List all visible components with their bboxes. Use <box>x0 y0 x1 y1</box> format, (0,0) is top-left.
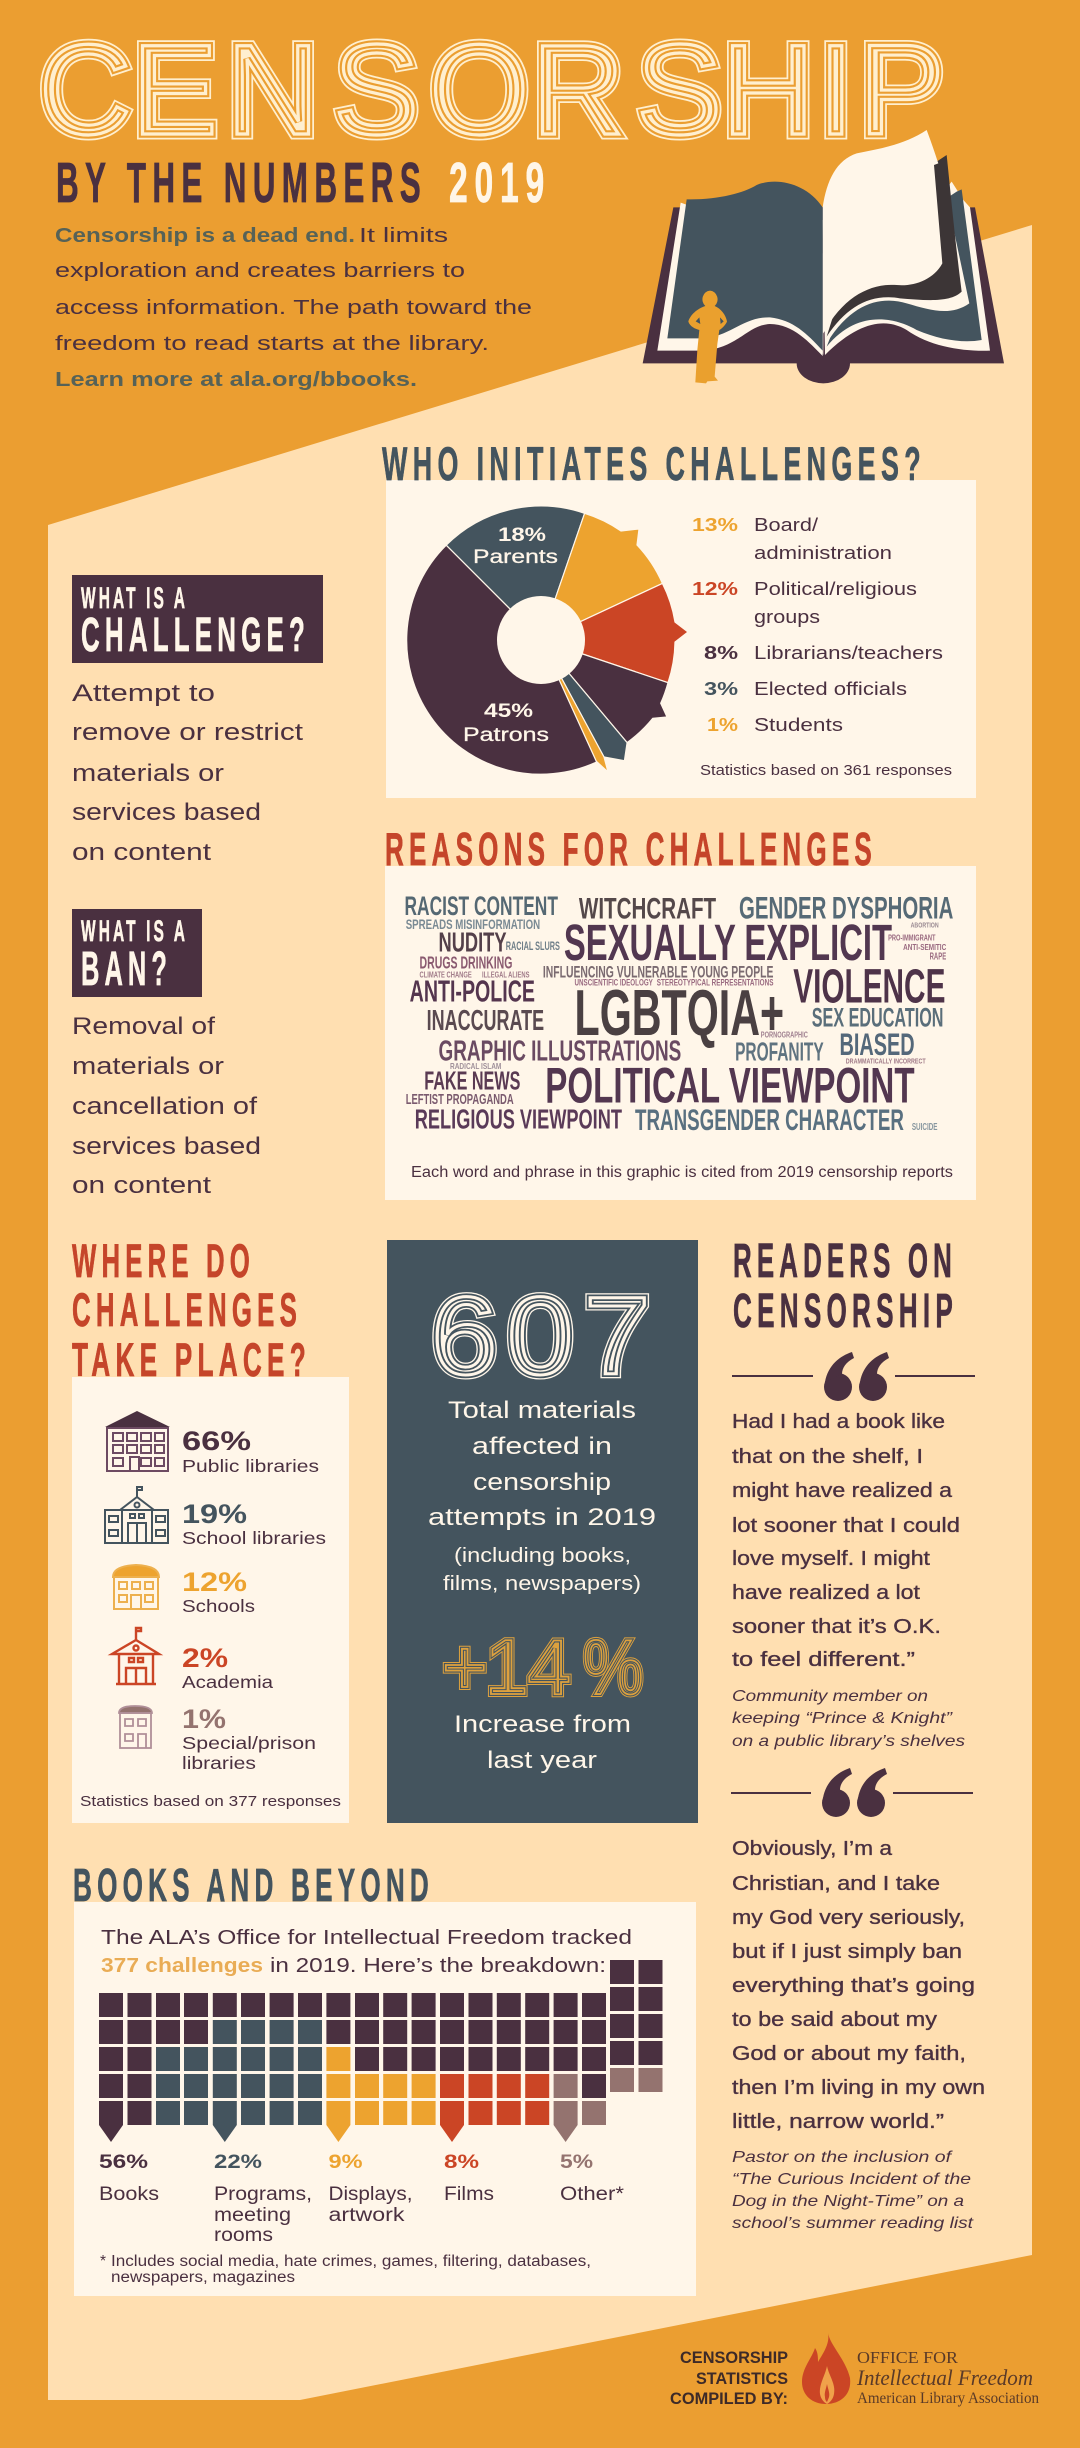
word cloud: INFLUENCING VULNERABLE YOUNG PEOPLE <box>543 962 773 981</box>
stat: school libraries <box>182 1499 326 1548</box>
panel: 607 total materials <box>387 1240 698 1823</box>
attribution one <box>732 1688 965 1750</box>
big number plus 14 percent: % <box>583 1625 643 1711</box>
compiled by text: STATISTICS <box>696 2370 788 2388</box>
stat: academia <box>182 1643 273 1692</box>
attribution two: “The Curious Incident of the <box>732 2171 971 2188</box>
compiled by text: COMPILED BY: <box>670 2390 788 2408</box>
category labels: Other* <box>560 2184 625 2205</box>
pie labels: Patrons <box>463 725 549 746</box>
quote one: that on the shelf, I <box>732 1446 923 1468</box>
category labels: Films <box>444 2184 494 2205</box>
definition: what is a ban: services based <box>72 1133 261 1160</box>
stat: schools: Schools <box>182 1596 255 1616</box>
big number plus 14 percent: +14 <box>442 1623 571 1711</box>
definition: what is a ban: cancellation of <box>72 1093 257 1120</box>
stat: special libraries: Special/prison <box>182 1733 316 1753</box>
title: CENSORSHIP <box>39 19 944 162</box>
logo text: OFFICE FOR <box>857 2348 959 2367</box>
quote two: but if I just simply ban <box>732 1941 962 1963</box>
compiled by text: CENSORSHIP <box>680 2349 788 2367</box>
category labels: 9% <box>328 2152 363 2173</box>
legend: 8% <box>704 643 738 663</box>
description text: attempts in 2019 <box>428 1504 656 1531</box>
legend: 1% <box>707 715 738 735</box>
word cloud: SPREADS MISINFORMATION <box>406 917 540 933</box>
category labels: artwork <box>328 2205 405 2226</box>
quote two: to be said about my <box>732 2009 937 2031</box>
description text: Total materials <box>448 1397 636 1424</box>
description text: films, newspapers) <box>443 1573 641 1595</box>
icon: flame logo <box>802 2333 850 2404</box>
definition: what is a ban: Removal of <box>72 1013 215 1040</box>
heading: where do challenges take place: CHALLENGES <box>72 1283 302 1336</box>
intro paragraph: Censorship is a dead end. <box>55 225 355 247</box>
word cloud: RACIST CONTENT <box>405 892 558 921</box>
increase text: last year <box>487 1747 597 1774</box>
intro paragraph: access information. The path toward the <box>55 297 532 319</box>
word cloud: LGBTQIA+ <box>575 977 784 1050</box>
category labels: rooms <box>214 2225 273 2246</box>
heading: where do challenges take place: TAKE PLACE? <box>72 1333 311 1386</box>
word cloud: SEX EDUCATION <box>812 1004 943 1033</box>
icon: open book with person <box>643 130 1004 383</box>
word cloud <box>405 891 953 1136</box>
word cloud: PRO-IMMIGRANT <box>888 933 936 942</box>
description text: (including books, <box>454 1545 631 1567</box>
big number plus 14 percent: % <box>583 1625 643 1711</box>
attribution one: Community member on <box>732 1688 928 1705</box>
icon: quote mark one <box>732 1352 975 1401</box>
word cloud: RACIAL SLURS <box>506 939 560 953</box>
stat: academia: Academia <box>182 1672 273 1692</box>
quote one: have realized a lot <box>732 1582 921 1604</box>
stat: schools: 12% <box>182 1567 247 1597</box>
quote two: little, narrow world.” <box>732 2111 944 2133</box>
intro paragraph: freedom to read starts at the library. <box>55 333 489 355</box>
legend: Political/religious <box>754 579 917 599</box>
note: Statistics based on 377 responses <box>80 1794 341 1810</box>
description text <box>428 1397 656 1595</box>
attribution two: school’s summer reading list <box>732 2215 974 2232</box>
definition: what is a challenge: on content <box>72 839 211 866</box>
attribution two <box>732 2149 974 2232</box>
legend: 13% <box>692 515 738 535</box>
quote one: to feel different.” <box>732 1649 915 1671</box>
category labels: 22% <box>214 2152 262 2173</box>
subtitle: BY THE NUMBERS <box>56 151 427 215</box>
icon: school library <box>105 1487 168 1543</box>
definition: what is a challenge: remove or restrict <box>72 719 303 746</box>
category labels: Displays, <box>328 2184 412 2205</box>
attribution one: keeping “Prince & Knight” <box>732 1710 953 1727</box>
word cloud: NUDITY <box>439 926 507 958</box>
word cloud: PORNOGRAPHIC <box>761 1030 808 1039</box>
category labels <box>99 2152 625 2246</box>
big number 607: 607 <box>431 1275 650 1398</box>
definition: what is a challenge: CHALLENGE? <box>81 609 310 662</box>
category labels: 5% <box>560 2152 593 2173</box>
panel: reasons for challenges <box>385 823 976 1200</box>
quote two: everything that’s going <box>732 1975 975 1997</box>
footnote: Includes social media, hate crimes, games, filtering, databases, <box>111 2253 591 2270</box>
category labels: 56% <box>99 2152 148 2173</box>
category labels: Books <box>99 2184 159 2205</box>
legend: administration <box>754 543 892 563</box>
title: CENSORSHIP <box>39 19 944 162</box>
description text: censorship <box>473 1469 611 1496</box>
intro text: in 2019. Here’s the breakdown: <box>270 1955 606 1977</box>
word cloud: ANTI-POLICE <box>410 975 535 1009</box>
description text: affected in <box>472 1433 612 1460</box>
legend: Board/ <box>754 515 818 535</box>
word cloud: SUICIDE <box>912 1122 938 1133</box>
definition: what is a ban: materials or <box>72 1053 224 1080</box>
stat: public libraries: 66% <box>182 1426 251 1456</box>
stat: school libraries: School libraries <box>182 1528 326 1548</box>
big number plus 14 percent: % <box>583 1625 643 1711</box>
legend: Elected officials <box>754 679 907 699</box>
pie labels: Parents <box>473 547 558 568</box>
big number 607: 607 <box>431 1275 650 1398</box>
panel: where challenges take place <box>72 1377 349 1823</box>
attribution two: Pastor on the inclusion of <box>732 2149 953 2166</box>
attribution one: on a public library’s shelves <box>732 1733 965 1750</box>
legend: Students <box>754 715 843 735</box>
stat: special libraries: libraries <box>182 1753 256 1773</box>
word cloud: FAKE NEWS <box>424 1067 520 1095</box>
footnote <box>100 2253 591 2286</box>
word cloud: ANTI-SEMITIC <box>903 943 946 953</box>
word cloud: STEREOTYPICAL REPRESENTATIONS <box>657 978 774 988</box>
quote two: then I’m living in my own <box>732 2077 985 2099</box>
definition: what is a ban: WHAT IS A <box>81 915 188 948</box>
stat: special libraries: 1% <box>182 1704 226 1734</box>
intro paragraph: Learn more at ala.org/bbooks. <box>55 369 417 391</box>
caption: Each word and phrase in this graphic is cited from 2019 censorship reports <box>411 1164 953 1181</box>
intro text <box>101 1927 632 1977</box>
stat: special libraries <box>182 1704 316 1773</box>
word cloud: GRAPHIC ILLUSTRATIONS <box>439 1034 681 1067</box>
legend <box>692 515 943 735</box>
quote two: God or about my faith, <box>732 2043 966 2065</box>
logo text <box>856 2348 1039 2407</box>
category labels: Programs, <box>214 2184 312 2205</box>
note: Statistics based on 361 responses <box>700 763 952 779</box>
quote one <box>732 1411 960 1671</box>
pie chart <box>407 506 688 774</box>
icon: quote mark two <box>731 1768 973 1817</box>
legend: groups <box>754 607 820 627</box>
quote one: might have realized a <box>732 1480 953 1502</box>
heading: books and beyond: BOOKS AND BEYOND <box>73 1859 434 1911</box>
word cloud: INACCURATE <box>427 1004 544 1036</box>
heading <box>733 1235 958 1338</box>
intro text: 377 challenges <box>101 1955 263 1977</box>
definition: what is a challenge: Attempt to <box>72 680 215 707</box>
pie labels: 45% <box>484 701 533 722</box>
word cloud: BIASED <box>839 1028 915 1062</box>
definition: what is a challenge: materials or <box>72 760 224 787</box>
quote two <box>732 1838 985 2133</box>
heading: where do challenges take place <box>72 1234 311 1386</box>
pie labels <box>463 525 558 746</box>
panel: who initiates challenges <box>382 437 976 798</box>
word cloud: RADICAL ISLAM <box>450 1062 501 1071</box>
stat: academia: 2% <box>182 1643 228 1673</box>
word cloud: LEFTIST PROPAGANDA <box>406 1091 514 1108</box>
definition: what is a ban: on content <box>72 1172 211 1199</box>
quote one: sooner that it’s O.K. <box>732 1616 941 1638</box>
word cloud: RAPE <box>930 951 946 962</box>
category labels: 8% <box>444 2152 479 2173</box>
word cloud: CLIMATE CHANGE <box>420 970 472 979</box>
increase text: Increase from <box>454 1711 631 1738</box>
word cloud: RELIGIOUS VIEWPOINT <box>415 1105 622 1135</box>
intro paragraph <box>55 225 532 391</box>
stat: public libraries: Public libraries <box>182 1456 319 1476</box>
footer credit <box>670 2333 1039 2408</box>
attribution two: Dog in the Night-Time” on a <box>732 2193 964 2210</box>
compiled by text <box>670 2349 788 2408</box>
quote two: my God very seriously, <box>732 1907 965 1929</box>
word cloud: WITCHCRAFT <box>579 891 716 925</box>
title: CENSORSHIP <box>39 19 944 162</box>
definition: what is a challenge: WHAT IS A <box>81 582 188 615</box>
stat: school libraries: 19% <box>182 1499 247 1529</box>
quote one: lot sooner that I could <box>732 1515 960 1537</box>
category labels: meeting <box>214 2205 291 2226</box>
word cloud: PROFANITY <box>735 1038 824 1067</box>
word cloud: DRAMMATICALLY INCORRECT <box>846 1056 926 1065</box>
panel: readers on censorship <box>731 1235 985 2232</box>
panel: books and beyond <box>74 1902 696 2296</box>
big number 607: 607 <box>431 1275 650 1398</box>
quote two: Obviously, I’m a <box>732 1838 893 1860</box>
icon: schools <box>113 1565 159 1609</box>
icon: academia <box>112 1628 159 1684</box>
big number plus 14 percent: +14 <box>442 1623 571 1711</box>
definition: what is a challenge: services based <box>72 799 261 826</box>
intro text: The ALA’s Office for Intellectual Freedom tracked <box>101 1927 632 1949</box>
definition: what is a ban <box>72 909 261 1199</box>
word cloud: UNSCIENTIFIC IDEOLOGY <box>575 978 653 988</box>
intro paragraph: exploration and creates barriers to <box>55 260 465 282</box>
waffle chart <box>99 1960 662 2142</box>
increase text <box>454 1711 631 1774</box>
quote two: Christian, and I take <box>732 1873 940 1895</box>
word cloud: VIOLENCE <box>793 960 945 1014</box>
icon: special or prison library <box>119 1706 152 1748</box>
quote one: love myself. I might <box>732 1548 931 1570</box>
icon: public library <box>105 1411 170 1471</box>
stat: schools <box>182 1567 255 1616</box>
big number plus 14 percent: +14 <box>442 1623 571 1711</box>
word cloud: DRUGS DRINKING <box>420 953 512 973</box>
definition: what is a ban: BAN? <box>81 943 172 996</box>
footnote: * <box>100 2253 106 2270</box>
stat: public libraries <box>182 1426 319 1476</box>
subtitle: 2019 <box>449 151 551 215</box>
icon: standing person <box>688 291 727 383</box>
intro paragraph: It limits <box>359 225 448 247</box>
quote one: Had I had a book like <box>732 1411 945 1433</box>
pie labels: 18% <box>498 525 546 546</box>
word cloud: ILLEGAL ALIENS <box>482 970 529 979</box>
logo text: Intellectual Freedom <box>856 2365 1033 2390</box>
legend: 3% <box>704 679 738 699</box>
heading: where do challenges take place: WHERE DO <box>72 1234 255 1287</box>
word cloud: ABORTION <box>911 921 939 929</box>
logo text: American Library Association <box>857 2390 1039 2407</box>
legend: Librarians/teachers <box>754 643 943 663</box>
big number plus 14 percent <box>442 1623 643 1711</box>
definition: what is a challenge <box>72 575 323 866</box>
footnote: newspapers, magazines <box>111 2269 295 2286</box>
legend: 12% <box>692 579 738 599</box>
